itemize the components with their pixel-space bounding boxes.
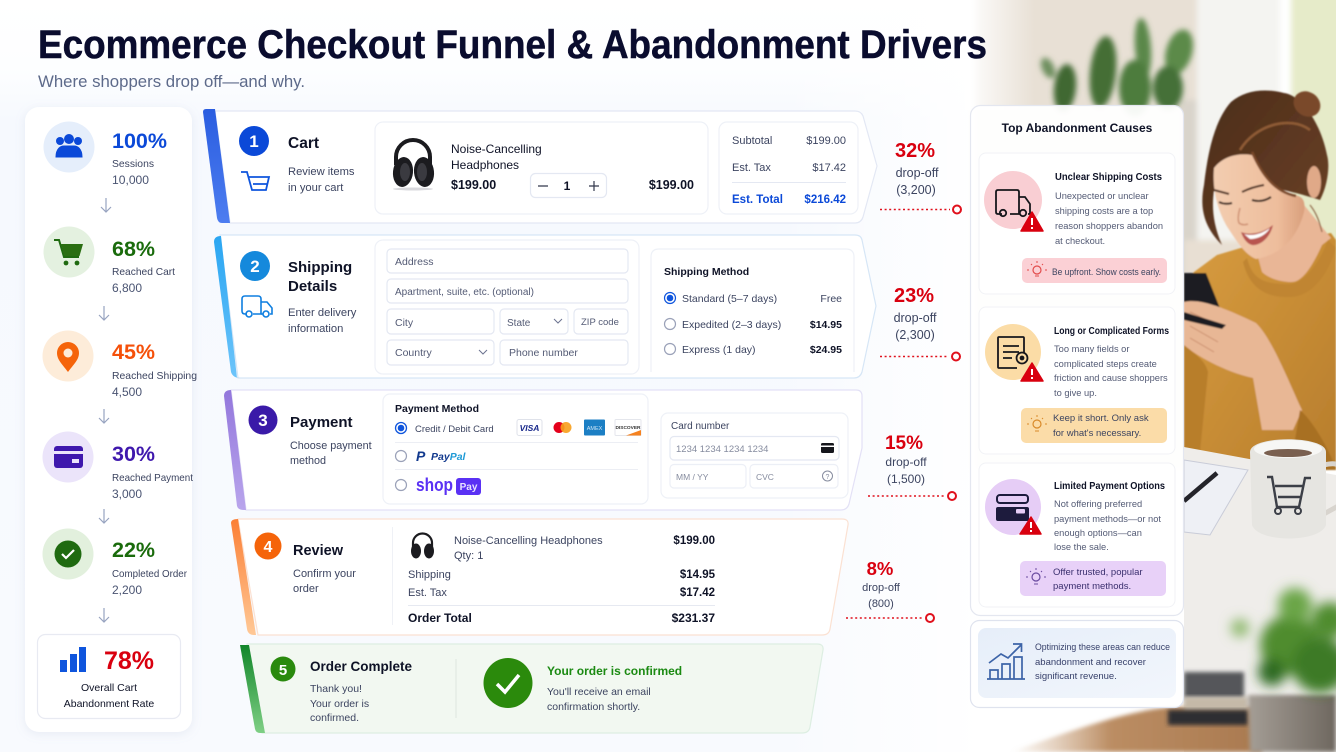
icon: warning [1021,212,1043,231]
hand and wrist [1184,301,1302,430]
step number: 4 [264,539,273,556]
cause: shipping costs: shipping costs are a top [1055,206,1153,216]
step description [310,683,369,724]
panel heading: Top Abandonment Causes [1002,121,1153,135]
table foreground [1184,447,1336,752]
order review list: Order Total [408,611,472,625]
coffee mug with cart [1250,439,1336,538]
tip: Keep it short. Only ask [1053,413,1149,424]
stat: reached payment: Reached Payment [112,472,193,484]
phone [1184,273,1223,316]
step description [293,568,356,595]
callout: overall abandonment: Overall Cart [81,682,137,694]
stat: reached cart: 6,800 [112,281,142,295]
address form: Phone number [509,347,578,359]
stat: sessions: Sessions [112,158,154,170]
icon: warning [1020,517,1041,534]
icon: growth chart [987,644,1025,679]
logo: discover [615,420,641,436]
step number [240,251,270,281]
shipping method options: $14.95 [810,319,842,331]
drop-off 15% [868,433,956,500]
cause: limited payment options: lose the sale. [1054,542,1109,552]
order review list: Qty: 1 [454,550,483,562]
icon: headphones [411,534,434,558]
item card [375,122,708,214]
neck [1256,205,1331,282]
confirmation message: You'll receive an email [547,686,651,698]
accent bar [231,519,256,635]
step description: method [290,455,326,467]
step description: Thank you! [310,683,362,695]
step description: Confirm your [293,568,356,580]
step number [239,126,269,156]
address form: Address [395,256,434,268]
logo: amex: AMEX [587,426,603,432]
arrow [101,198,111,212]
arrow [99,409,109,423]
payment method list [383,394,648,504]
stat: reached shipping: 4,500 [112,385,142,399]
cause: long forms: Long or Complicated Forms [1054,325,1169,337]
drop-off 32%: 32% [895,140,935,162]
address form: Apartment, suite, etc. (optional) [395,287,534,298]
background photo: woman using phone at table [965,0,1336,752]
accent bar [240,645,265,733]
notebook and pen [1184,460,1248,535]
cause: limited payment options: Limited Payment Options [1054,480,1165,492]
cause: long forms: to give up. [1054,388,1097,398]
logo: mastercard [554,422,572,433]
blurred plant and pot [1231,588,1336,752]
accent bar [203,109,230,223]
panel: revenue callout: abandonment and recover [1035,657,1146,668]
collar ribbing [1243,240,1336,297]
logo: shop pay: Pay [460,482,478,493]
title: Ecommerce Checkout Funnel & Abandonment Drivers [38,23,987,67]
panel: step 2 shipping details [214,235,876,378]
order review list [408,534,716,625]
cause: long forms: friction and cause shoppers [1054,373,1168,383]
step description [290,440,372,467]
shipping method options: Expedited (2–3 days) [682,319,781,331]
card details form: Card number [671,421,730,432]
order summary: $17.42 [812,162,846,174]
arrow [99,509,109,523]
stat: reached shipping: 45% [112,340,155,364]
step heading: Cart [288,135,319,152]
stat: reached cart: Reached Cart [112,266,175,278]
step description: in your cart [288,182,344,194]
drop-off 15%: 15% [885,433,923,454]
item card: $199.00 [451,178,496,192]
confirmation message: Your order is confirmed [547,664,682,678]
hair bun [1289,86,1325,122]
shipping method options: Shipping Method [664,266,749,278]
cause: limited payment options: payment methods—or not [1054,514,1161,524]
step heading: Review [293,543,344,559]
payment method list: Payment Method [395,403,479,415]
step heading: Details [288,278,337,295]
order review list: Shipping [408,569,451,581]
step number [254,532,282,560]
card details form: MM / YY [676,472,709,482]
address form: Country [395,347,433,359]
cause: long forms: complicated steps create [1054,359,1157,369]
logo: visa [517,420,542,436]
hair back [1202,90,1328,245]
logo: discover: DISCOVER [615,425,641,431]
drop-off 8%: (800) [868,598,894,610]
logo: paypal [416,448,467,464]
callout: overall abandonment: Abandonment Rate [64,698,154,710]
confirmation message: confirmation shortly. [547,701,640,713]
stat: completed order: 22% [112,538,155,562]
step description [288,166,355,194]
icon: confirmed check [484,658,532,708]
panel: revenue callout: Optimizing these areas can reduce [1035,642,1170,653]
drop-off 23% [880,285,960,360]
step description: Enter delivery [288,307,357,319]
item card: 1 [564,179,571,193]
cause: shipping costs: Unexpected or unclear [1055,191,1149,201]
stat: sessions [44,122,167,187]
panel: step 5 order complete [240,644,823,733]
stat: sessions: 100% [112,129,167,153]
drop-off 15%: drop-off [885,455,927,469]
callout: overall abandonment: 78% [104,647,154,675]
logo: shop pay [416,475,481,495]
step heading: Order Complete [310,659,413,674]
card details form [661,413,848,498]
subtitle: Where shoppers drop off—and why. [38,73,305,91]
panel: step 1 cart [203,109,877,223]
stat: completed order: 2,200 [112,583,142,597]
item card: Headphones [451,158,519,172]
logo: amex [584,420,605,436]
arrow [99,608,109,622]
drop-off 8%: drop-off [862,582,901,594]
arrow [99,306,109,320]
panel: funnel summary [25,107,197,732]
drop-off 32%: drop-off [896,166,939,180]
address form: State [507,318,531,329]
address form: City [395,317,414,329]
drop-off 23%: drop-off [894,311,937,325]
logo: shop pay: shop [416,475,453,495]
step number: 2 [250,257,260,276]
stat: completed order: Completed Order [112,568,187,580]
shipping method options: Express (1 day) [682,344,756,356]
wood floor and blurred device [1010,672,1262,752]
drop-off 8% [846,558,934,622]
step description [288,307,357,335]
step description: confirmed. [310,712,359,724]
icon: cards [996,495,1029,521]
panel: step 4 review [231,519,848,635]
step number: 5 [279,662,287,679]
panel: revenue callout: significant revenue. [1035,671,1117,682]
step description: Choose payment [290,440,372,452]
shipping method options [651,249,854,372]
panel: top abandonment causes [970,106,1184,616]
order review list: $17.42 [680,587,715,599]
item card: $199.00 [649,178,694,192]
cause: shipping costs [979,153,1175,294]
tip: for what's necessary. [1053,428,1141,439]
cause: limited payment options: enough options—can [1054,528,1142,538]
step heading: Shipping [288,259,352,276]
icon: form [998,337,1028,368]
brows and closed eyes [1214,185,1264,194]
step description: order [293,583,319,595]
step number [248,406,278,434]
logo: paypal: P [416,448,426,464]
card details form: CVC [756,472,774,482]
callout: overall abandonment [38,634,180,718]
icon: truck [996,190,1030,216]
tip [1020,561,1166,596]
hair strands [1240,123,1310,150]
step number [270,656,296,682]
drop-off 23%: 23% [894,285,934,307]
sweater [1184,233,1336,470]
confirmation message [547,664,682,713]
drop-off 8%: 8% [867,558,893,579]
stat: reached shipping [42,330,197,399]
logo: paypal: PayPal [431,451,467,463]
card details form: ? [826,474,830,481]
card details form: 1234 1234 1234 1234 [676,444,768,455]
order review list: $14.95 [680,569,716,581]
stat: completed order [42,528,187,597]
cause: shipping costs: at checkout. [1055,236,1105,246]
icon: headphones [391,140,436,190]
blurred house plant [1038,18,1198,116]
tip [1022,258,1167,283]
cause: shipping costs: reason shoppers abandon [1055,221,1163,231]
accent bar [224,390,246,510]
order review list: Est. Tax [408,587,447,599]
stat: reached payment [42,432,193,501]
order summary: Est. Tax [732,162,771,174]
order summary: Subtotal [732,135,772,147]
stat: reached cart [44,226,175,295]
drop-off 32%: (3,200) [896,183,936,197]
panel: step 3 payment [224,390,862,510]
drop-off 23%: (2,300) [895,328,935,342]
step number: 3 [258,411,268,430]
cause: long forms: Too many fields or [1054,344,1129,354]
drop-off 15%: (1,500) [887,472,925,486]
step description: information [288,323,343,335]
stat: reached payment: 30% [112,442,155,466]
panel: revenue callout [970,620,1184,708]
cause: limited payment options: Not offering preferred [1054,499,1142,509]
order review list: $231.37 [672,611,715,625]
stat: reached shipping: Reached Shipping [112,370,197,382]
logo: visa: VISA [520,423,539,433]
shipping method options: Free [820,293,842,305]
address form [375,240,639,374]
order review list: $199.00 [673,535,715,547]
order summary [719,122,858,214]
shipping method options: Standard (5–7 days) [682,293,777,305]
tip [1021,408,1167,443]
payment method list: Credit / Debit Card [415,424,494,435]
item card: Noise-Cancelling [451,142,542,156]
tip: Offer trusted, popular [1053,567,1143,578]
cause: limited payment options [979,463,1175,607]
order summary: $199.00 [806,135,846,147]
drop-off 32% [880,140,961,214]
step heading [288,259,352,295]
order summary: $216.42 [804,194,846,206]
step number: 1 [249,132,259,151]
step description: Review items [288,166,355,178]
ear [1307,166,1321,198]
step heading: Payment [290,414,353,431]
stat: reached payment: 3,000 [112,487,142,501]
order review list: Noise-Cancelling Headphones [454,535,603,547]
icon: truck [242,296,272,317]
face [1214,154,1305,259]
icon: warning [1021,363,1043,381]
step description: Your order is [310,698,369,710]
tip: payment methods. [1053,581,1131,592]
cause: long forms [979,307,1175,454]
tip: Be upfront. Show costs early. [1052,267,1161,278]
smile [1241,225,1273,245]
accent bar [214,236,240,378]
order summary: Est. Total [732,194,783,206]
sleeve [1184,345,1208,452]
stat: reached cart: 68% [112,237,155,261]
stat: sessions: 10,000 [112,173,149,187]
cause: shipping costs: Unclear Shipping Costs [1055,171,1162,183]
shipping method options: $24.95 [810,344,842,356]
icon: cart [241,172,269,190]
address form: ZIP code [581,317,619,328]
